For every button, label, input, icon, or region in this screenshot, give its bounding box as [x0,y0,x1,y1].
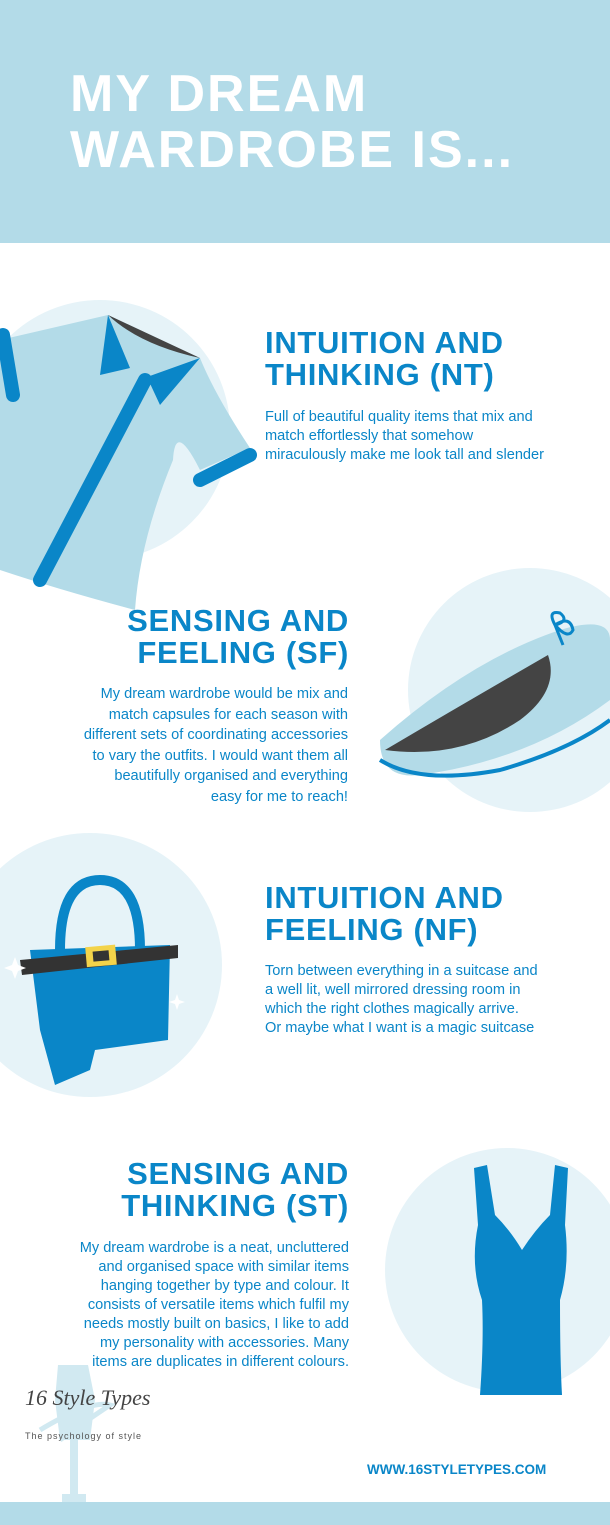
section ST text: items are duplicates in different colours. [92,1354,349,1370]
section NT text: miraculously make me look tall and slender [265,447,544,463]
logo text: 16 Style Types [25,1385,150,1410]
section ST text [80,1240,349,1370]
title: WARDROBE IS... [70,121,514,179]
section ST text: consists of versatile items which fulfil my [88,1297,349,1313]
section ST text: and organised space with similar items [98,1259,349,1275]
section ST text: hanging together by type and colour. It [101,1278,349,1294]
icon: shirt [0,300,250,610]
section SF heading [127,603,349,670]
logo: mannequin [40,1365,110,1502]
section NT text: Full of beautiful quality items that mix and [265,409,533,425]
section SF heading: SENSING AND [127,603,349,638]
section NT heading: INTUITION AND [265,325,504,360]
section SF text [84,686,348,804]
section NT text [265,409,544,463]
title: MY DREAM [70,65,368,123]
section NF heading [265,880,504,947]
section NF text: Torn between everything in a suitcase and [265,963,538,979]
section ST text: needs mostly built on basics, I like to add [84,1316,349,1332]
section SF text: My dream wardrobe would be mix and [101,686,348,702]
section SF text: match capsules for each season with [109,706,348,722]
section NF text: Or maybe what I want is a magic suitcase [265,1020,534,1036]
section NT heading: THINKING (NT) [265,357,495,392]
section SF text: easy for me to reach! [211,788,348,804]
section SF text: to vary the outfits. I would want them all [92,748,348,764]
section ST heading: SENSING AND [127,1156,349,1191]
title [70,65,514,179]
icon: dress [385,1148,610,1395]
section SF text: beautifully organised and everything [114,768,348,784]
section NF text: which the right clothes magically arrive. [265,1001,519,1017]
section NT heading [265,325,504,392]
header band [0,0,610,243]
section SF text: different sets of coordinating accessories [84,727,348,743]
section ST heading: THINKING (ST) [121,1188,349,1223]
icon: handbag [0,833,222,1097]
website: WWW.16STYLETYPES.COM [367,1462,546,1477]
section NF text: a well lit, well mirrored dressing room in [265,982,520,998]
footer band [0,1502,610,1525]
icon: ballet flat [380,568,610,812]
section ST heading [121,1156,349,1223]
section NF text [265,963,538,1036]
section ST text: my personality with accessories. Many [100,1335,349,1351]
section NF heading: FEELING (NF) [265,912,478,947]
section NF heading: INTUITION AND [265,880,504,915]
logo text: The psychology of style [25,1431,142,1441]
section NT text: match effortlessly that somehow [265,428,473,444]
section SF heading: FEELING (SF) [137,635,349,670]
logo text [25,1385,150,1441]
section ST text: My dream wardrobe is a neat, uncluttered [80,1240,349,1256]
